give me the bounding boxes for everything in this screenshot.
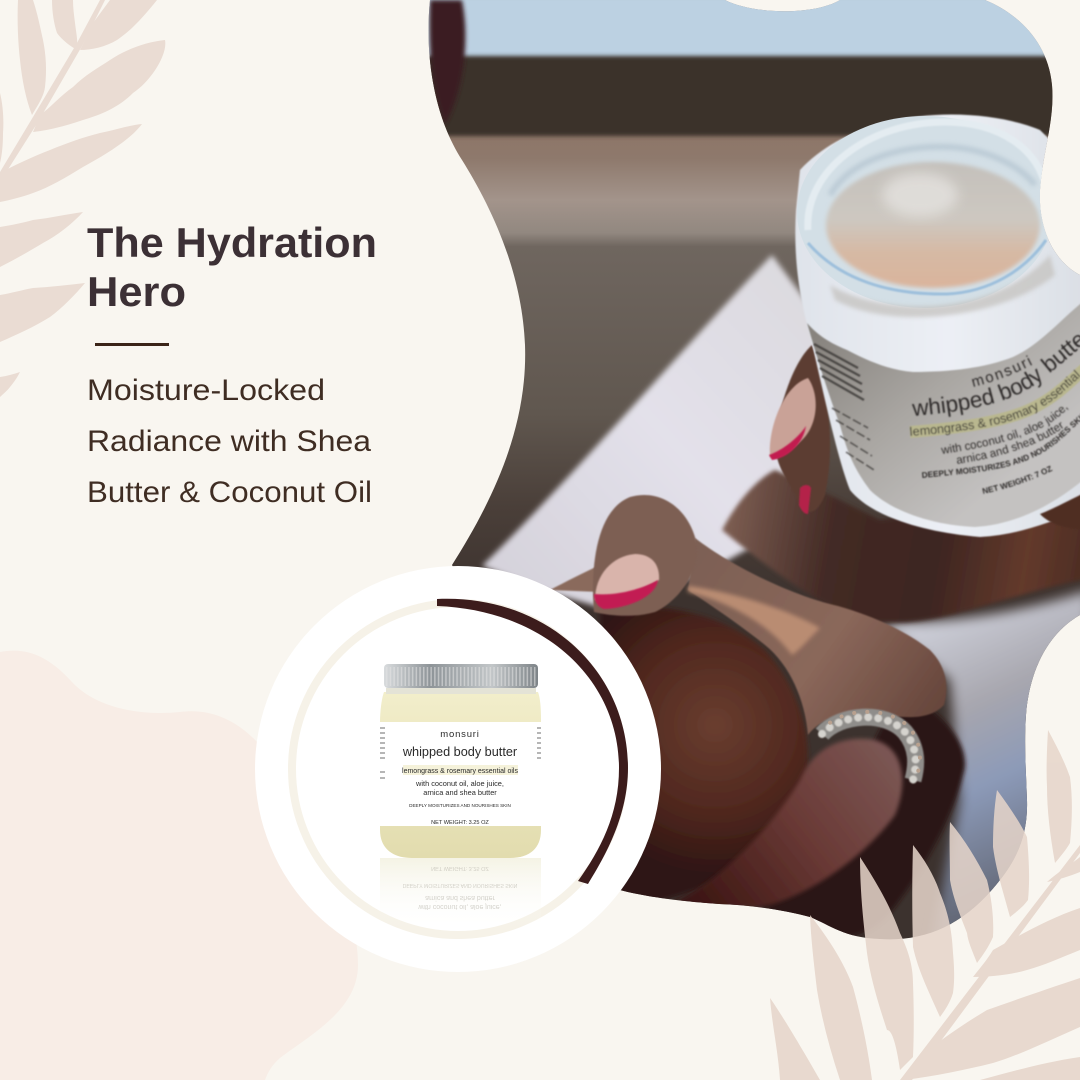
jar label: arnica and shea butter	[423, 788, 497, 797]
pale inner ring	[292, 603, 624, 935]
dark accent arc	[437, 599, 628, 884]
towel	[482, 255, 835, 610]
label text: NET WEIGHT: 7 OZ	[982, 464, 1054, 495]
fingernails	[770, 378, 816, 458]
divider under title	[95, 343, 169, 346]
label text: arnica and shea butter	[956, 421, 1064, 465]
jar lid	[384, 664, 538, 688]
jar reflection: with coconut oil, aloe juice,	[417, 903, 502, 910]
fingers under jar: right side	[1039, 494, 1080, 526]
blue rim line	[808, 240, 1046, 294]
jar body	[380, 692, 541, 858]
photo background: wall and counter	[420, 0, 1080, 1000]
product circle badge	[255, 566, 661, 972]
jar label: DEEPLY MOISTURIZES AND NOURISHES SKIN	[409, 803, 511, 808]
label side text lines	[814, 344, 864, 400]
ring	[822, 712, 920, 780]
label text: with coconut oil, aloe juice,	[940, 406, 1070, 455]
jar body	[795, 115, 1080, 537]
dark shape: arm under hand	[600, 606, 808, 905]
lower hand	[550, 538, 965, 938]
title: Hero	[87, 268, 186, 315]
jar neck	[386, 688, 536, 694]
jar label: whipped body butter	[402, 745, 518, 759]
background blob: pale pink	[0, 651, 358, 1080]
jar reflection	[380, 858, 541, 930]
upper hand holding jar	[722, 345, 1080, 623]
jar label	[806, 304, 1080, 528]
finger below ring	[675, 739, 902, 908]
jar rim and cream	[797, 116, 1053, 308]
dark object top left	[430, 0, 465, 125]
thumb with pink nail	[593, 495, 697, 616]
jar label	[380, 722, 541, 826]
jar label: with coconut oil, aloe juice,	[415, 779, 504, 788]
cream highlight	[882, 173, 958, 217]
leaf decoration: bottom right	[770, 730, 1080, 1080]
subtitle text: Moisture-Locked	[87, 374, 325, 407]
photo panel: hands holding jar of body butter	[428, 0, 1080, 940]
jar reflection: arnica and shea butter	[425, 894, 495, 901]
subtitle text: Butter & Coconut Oil	[87, 476, 372, 509]
jar reflection: DEEPLY MOISTURIZES AND NOURISHES SKIN	[403, 882, 518, 888]
lower towel right	[880, 590, 1080, 960]
skin crease highlight	[688, 586, 820, 655]
glass band under rim	[830, 255, 1055, 317]
label text	[909, 334, 1080, 495]
leaf decoration: top left	[0, 0, 165, 397]
jar reflection: NET WEIGHT: 3.25 OZ	[431, 865, 489, 871]
large jar of body butter	[794, 114, 1080, 538]
title: The Hydration	[87, 219, 377, 266]
jar label: NET WEIGHT: 3.25 OZ	[431, 820, 489, 826]
label text: monsuri	[971, 354, 1033, 388]
subtitle text: Radiance with Shea	[87, 425, 371, 458]
product jar	[380, 664, 541, 930]
jar label: monsuri	[440, 729, 480, 740]
jar label: lemongrass & rosemary essential oils	[402, 768, 518, 775]
